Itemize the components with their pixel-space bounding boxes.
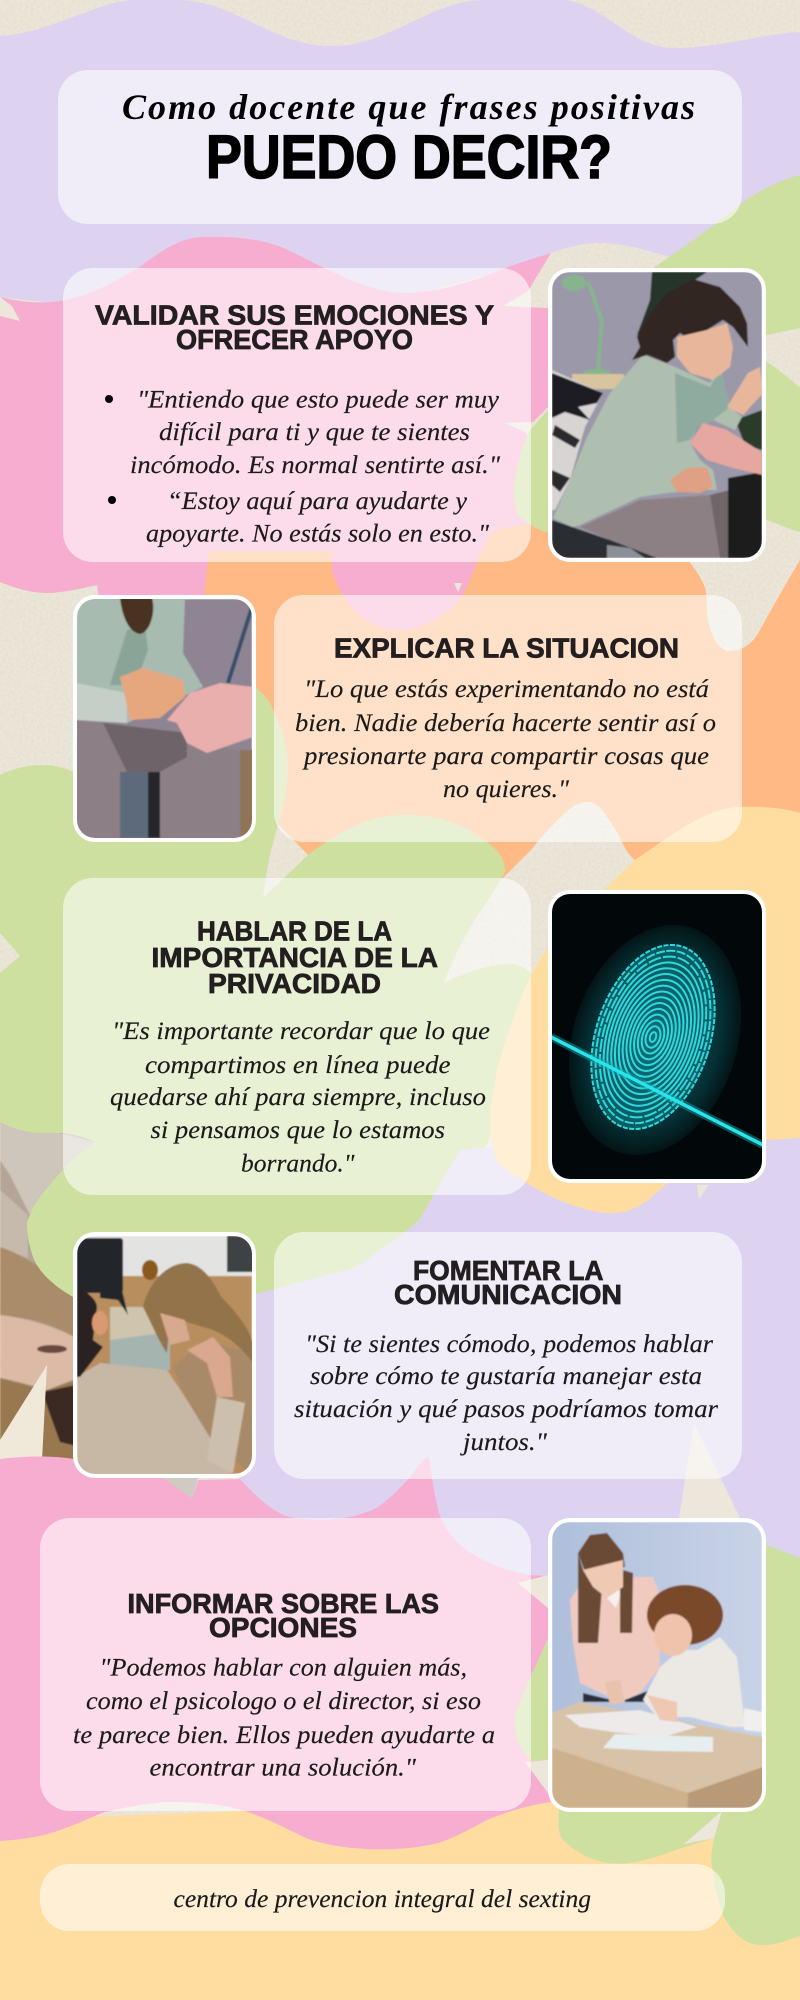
body text	[294, 1331, 718, 1456]
heading: FOMENTAR LA	[413, 1255, 604, 1286]
heading: PRIVACIDAD	[208, 968, 381, 999]
panel: explicar la situacion	[274, 595, 742, 842]
heading: HABLAR DE LA	[197, 916, 392, 946]
photo: two students with books	[548, 1518, 766, 1812]
body text: si pensamos que lo estamos	[150, 1117, 445, 1144]
heading: IMPORTANCIA DE LA	[152, 942, 438, 973]
bullet list: apoyarte. No estás solo en esto."	[146, 520, 490, 548]
footer text: centro de prevencion integral del sexting	[174, 1886, 591, 1913]
body text: presionarte para compartir cosas que	[302, 743, 709, 770]
body text: "Si te sientes cómodo, podemos hablar	[305, 1331, 713, 1358]
body text: encontrar una solución."	[150, 1754, 417, 1782]
panel: importancia de la privacidad	[63, 878, 531, 1195]
photo: holding hands	[73, 595, 256, 842]
heading	[394, 1255, 622, 1310]
body text: sobre cómo te gustaría manejar esta	[310, 1363, 702, 1390]
heading: EXPLICAR LA SITUACION	[334, 632, 679, 664]
heading: VALIDAR SUS EMOCIONES Y	[95, 300, 494, 330]
heading	[152, 916, 438, 999]
body text: como el psicologo o el director, si eso	[86, 1688, 481, 1715]
heading: INFORMAR SOBRE LAS	[128, 1588, 439, 1619]
heading: COMUNICACION	[394, 1279, 622, 1310]
title line 2: PUEDO DECIR?	[206, 123, 612, 191]
body text: "Podemos hablar con alguien más,	[100, 1654, 467, 1682]
body text: quedarse ahí para siempre, incluso	[110, 1084, 486, 1111]
bullet list: "Entiendo que esto puede ser muy	[137, 386, 500, 414]
background: left photo peeking through	[0, 1118, 100, 1468]
panel: informar sobre las opciones	[40, 1518, 531, 1811]
bullet list: “Estoy aquí para ayudarte y	[167, 488, 468, 515]
heading	[128, 1588, 439, 1643]
body text: no quieres."	[443, 776, 570, 803]
panel: footer	[40, 1864, 725, 1931]
body text	[295, 676, 716, 803]
panel: validar sus emociones	[63, 268, 531, 562]
body text: "Es importante recordar que lo que	[112, 1018, 490, 1045]
heading: OFRECER APOYO	[176, 324, 413, 355]
body text: situación y qué pasos podríamos tomar	[294, 1396, 718, 1423]
heading	[95, 300, 494, 355]
panel: title	[58, 70, 742, 224]
photo: fingerprint scan	[541, 890, 769, 1183]
body text: "Lo que estás experimentando no está	[304, 676, 709, 703]
title line 1: Como docente que frases positivas	[122, 87, 695, 127]
bullet list	[105, 386, 501, 548]
panel: fomentar la comunicacion	[274, 1232, 742, 1479]
bullet list: difícil para ti y que te sientes	[159, 419, 470, 446]
photo: two women talking	[73, 1232, 256, 1478]
heading: OPCIONES	[209, 1612, 357, 1643]
body text: juntos."	[460, 1429, 548, 1456]
bullet list: incómodo. Es normal sentirte así."	[130, 452, 501, 479]
photo: woman in green sweater	[548, 268, 766, 562]
body text: bien. Nadie debería hacerte sentir así o	[295, 710, 716, 737]
body text: compartimos en línea puede	[145, 1052, 450, 1079]
body text: te parece bien. Ellos pueden ayudarte a	[73, 1722, 495, 1749]
body text	[110, 1018, 490, 1178]
body text: borrando."	[241, 1150, 355, 1178]
body text	[73, 1654, 495, 1782]
